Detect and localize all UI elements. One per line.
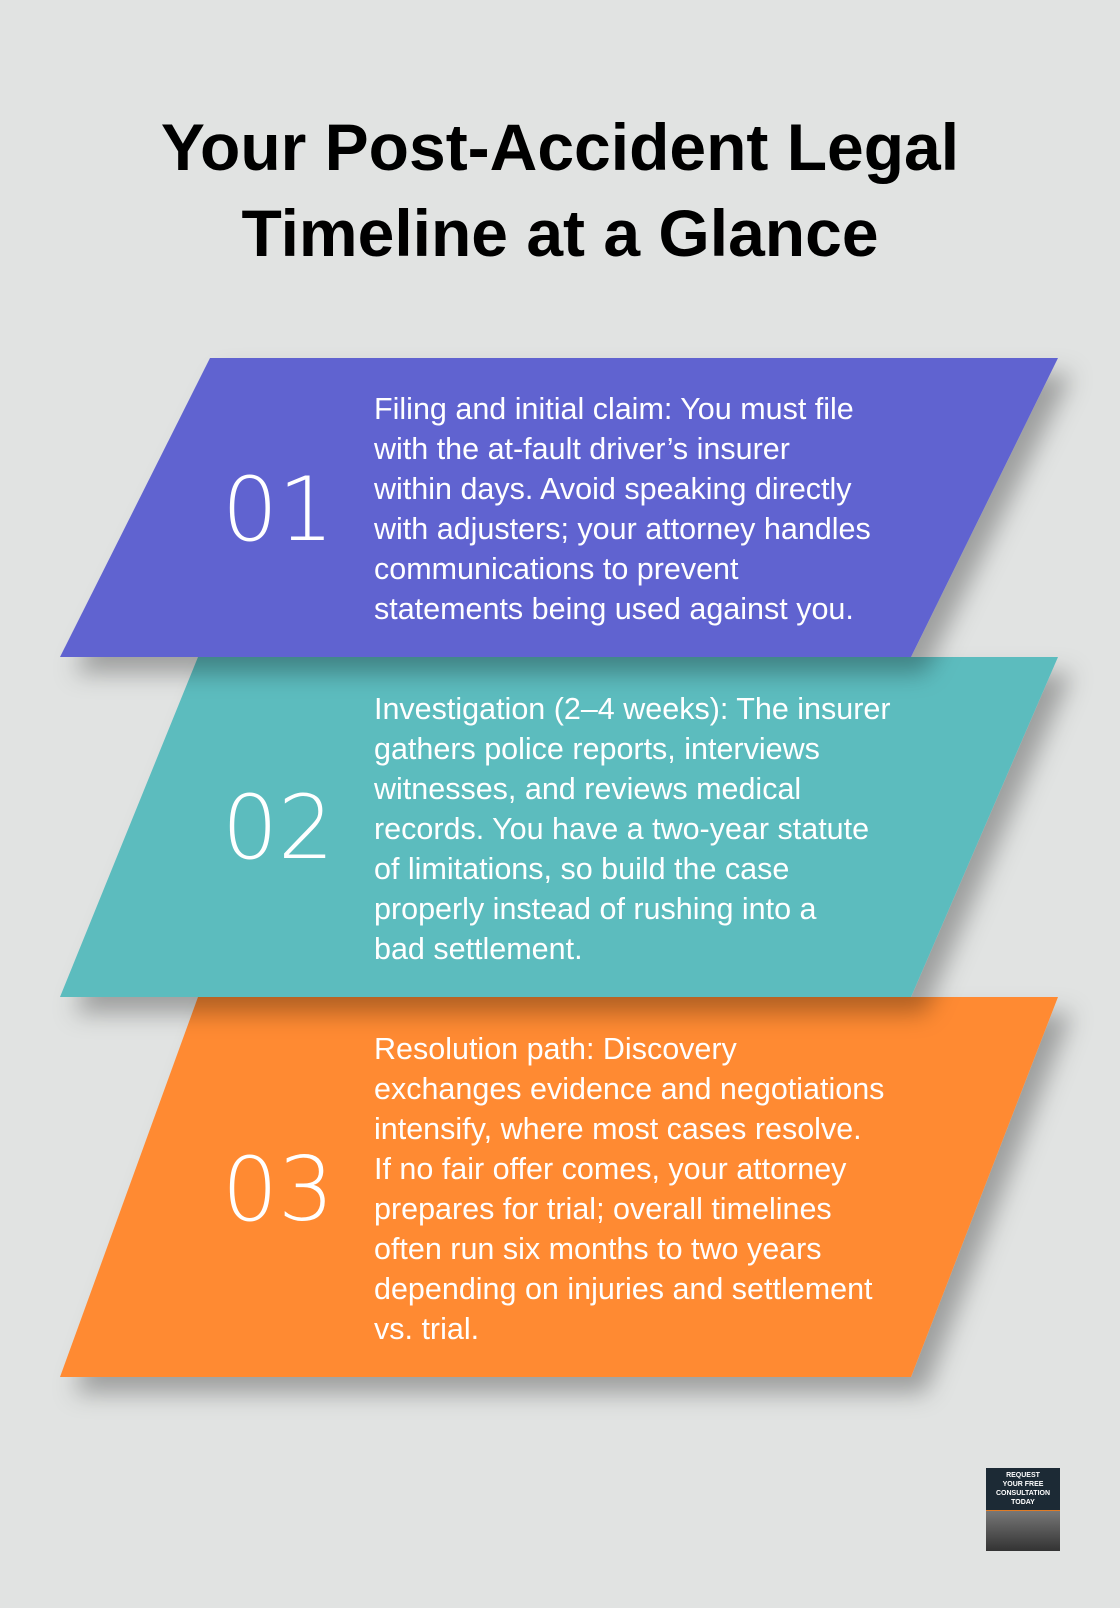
badge: consultation: CONSULTATION bbox=[996, 1490, 1050, 1497]
text 2: gathers police reports, interviews bbox=[374, 732, 820, 766]
text 2: records. You have a two-year statute bbox=[374, 812, 869, 846]
text 3: intensify, where most cases resolve. bbox=[374, 1112, 862, 1146]
text 3: Resolution path: Discovery bbox=[374, 1032, 737, 1066]
text 2: Investigation (2–4 weeks): The insurer bbox=[374, 692, 891, 726]
text 1: Filing and initial claim: You must file bbox=[374, 392, 854, 426]
badge: consultation: REQUEST bbox=[1006, 1472, 1040, 1479]
title: Timeline at a Glance bbox=[241, 196, 879, 270]
text 3 bbox=[374, 1032, 884, 1346]
text 2: bad settlement. bbox=[374, 932, 583, 966]
number 03: 03 bbox=[222, 1138, 334, 1241]
text 3: prepares for trial; overall timelines bbox=[374, 1192, 832, 1226]
text 3: If no fair offer comes, your attorney bbox=[374, 1152, 846, 1186]
badge: consultation bbox=[986, 1468, 1060, 1548]
text 3: often run six months to two years bbox=[374, 1232, 822, 1266]
text 1: within days. Avoid speaking directly bbox=[374, 472, 852, 506]
panel 2 shape bbox=[60, 657, 1058, 997]
number 01: 01 bbox=[222, 458, 334, 561]
text 3: depending on injuries and settlement bbox=[374, 1272, 873, 1306]
panel 1 shape bbox=[60, 358, 1058, 657]
text 2 bbox=[374, 692, 891, 966]
text 1 bbox=[374, 392, 871, 626]
text 3: vs. trial. bbox=[374, 1312, 479, 1346]
text 1: communications to prevent bbox=[374, 552, 738, 586]
text 3: exchanges evidence and negotiations bbox=[374, 1072, 884, 1106]
title bbox=[161, 110, 959, 270]
title: Your Post-Accident Legal bbox=[161, 110, 959, 184]
badge: consultation: TODAY bbox=[1011, 1499, 1035, 1506]
text 1: with adjusters; your attorney handles bbox=[374, 512, 871, 546]
text 2: witnesses, and reviews medical bbox=[374, 772, 801, 806]
text 2: of limitations, so build the case bbox=[374, 852, 789, 886]
text 1: with the at-fault driver’s insurer bbox=[374, 432, 790, 466]
number 02: 02 bbox=[222, 776, 334, 879]
badge: consultation: YOUR FREE bbox=[1003, 1481, 1043, 1488]
text 2: properly instead of rushing into a bbox=[374, 892, 817, 926]
text 1: statements being used against you. bbox=[374, 592, 854, 626]
panel 3 shape bbox=[60, 997, 1058, 1377]
